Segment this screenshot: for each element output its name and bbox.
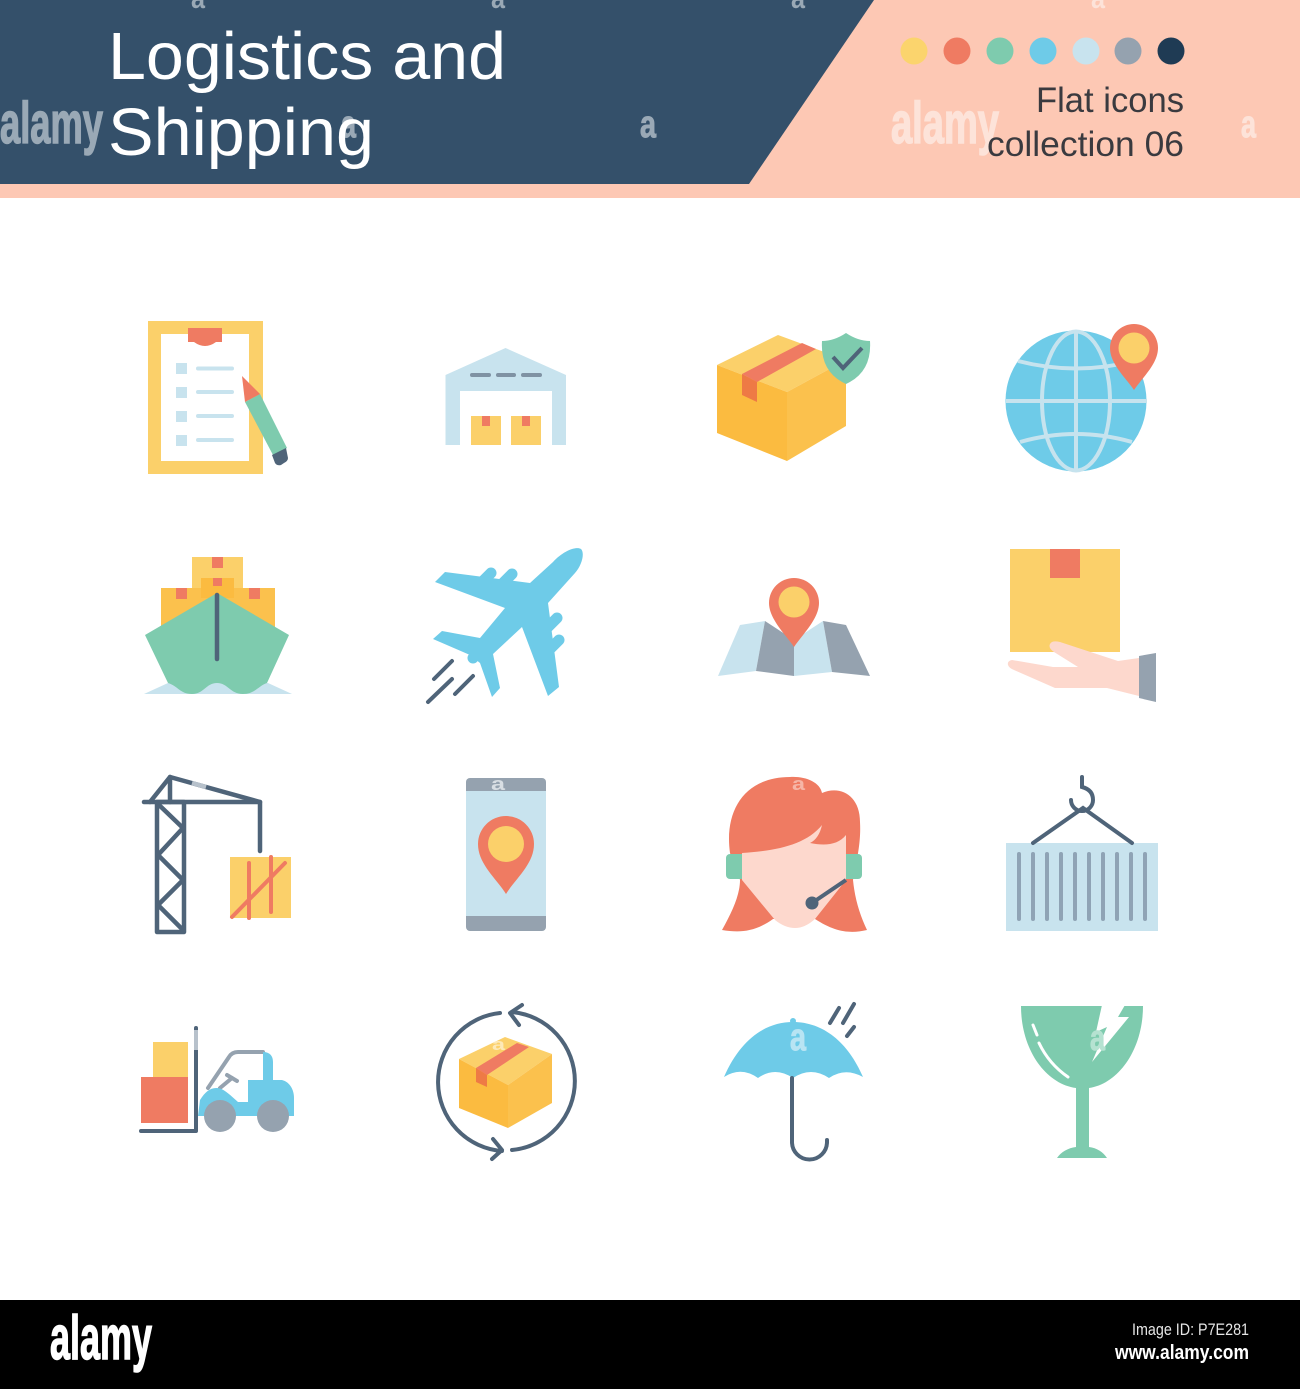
icon: insured parcel xyxy=(717,333,870,461)
icon: parcel on hand xyxy=(1008,549,1156,702)
footer bar xyxy=(0,1300,1300,1389)
icon: map with pin xyxy=(718,578,870,676)
icon: hanging shipping container xyxy=(1006,777,1158,931)
icon: support agent: a xyxy=(792,774,806,794)
banner watermarks: alamy xyxy=(891,91,999,156)
icon: forklift xyxy=(141,1028,294,1132)
banner watermarks: alamy xyxy=(0,91,103,156)
footer logo: alamy xyxy=(50,1304,152,1373)
icon: phone with location pin xyxy=(466,774,546,931)
icon: globe with location pin xyxy=(1006,324,1158,472)
banner watermarks: a xyxy=(341,104,357,146)
icon: parcel return cycle xyxy=(438,1005,575,1159)
subtitle: Flat icons xyxy=(1036,81,1184,120)
title: Logistics and xyxy=(108,19,506,94)
icon: support agent xyxy=(722,774,867,932)
header banner xyxy=(0,0,1300,198)
icon: airplane xyxy=(428,548,583,702)
title xyxy=(108,19,506,170)
icon: warehouse xyxy=(446,348,566,445)
icon: umbrella with rain: a xyxy=(790,1017,807,1059)
icon: parcel return cycle: a xyxy=(492,1035,506,1054)
icon: umbrella with rain xyxy=(724,1004,863,1160)
subtitle xyxy=(987,81,1184,164)
icon: phone with location pin: a xyxy=(491,774,506,794)
icon: fragile glass xyxy=(1021,1005,1143,1158)
colour palette dots xyxy=(900,38,1184,64)
website: www.alamy.com xyxy=(1114,1342,1249,1364)
image id: Image ID: P7E281 xyxy=(1132,1320,1249,1339)
banner watermarks: a xyxy=(640,104,657,146)
subtitle: collection 06 xyxy=(987,125,1184,164)
banner watermarks xyxy=(0,0,1257,156)
icon: crane with crate xyxy=(144,777,291,932)
icon: cargo ship xyxy=(144,557,292,694)
banner watermarks: a xyxy=(1241,104,1257,146)
title: Shipping xyxy=(108,95,374,170)
icon: fragile glass: a xyxy=(1090,1017,1106,1058)
icon: clipboard checklist xyxy=(148,321,288,474)
